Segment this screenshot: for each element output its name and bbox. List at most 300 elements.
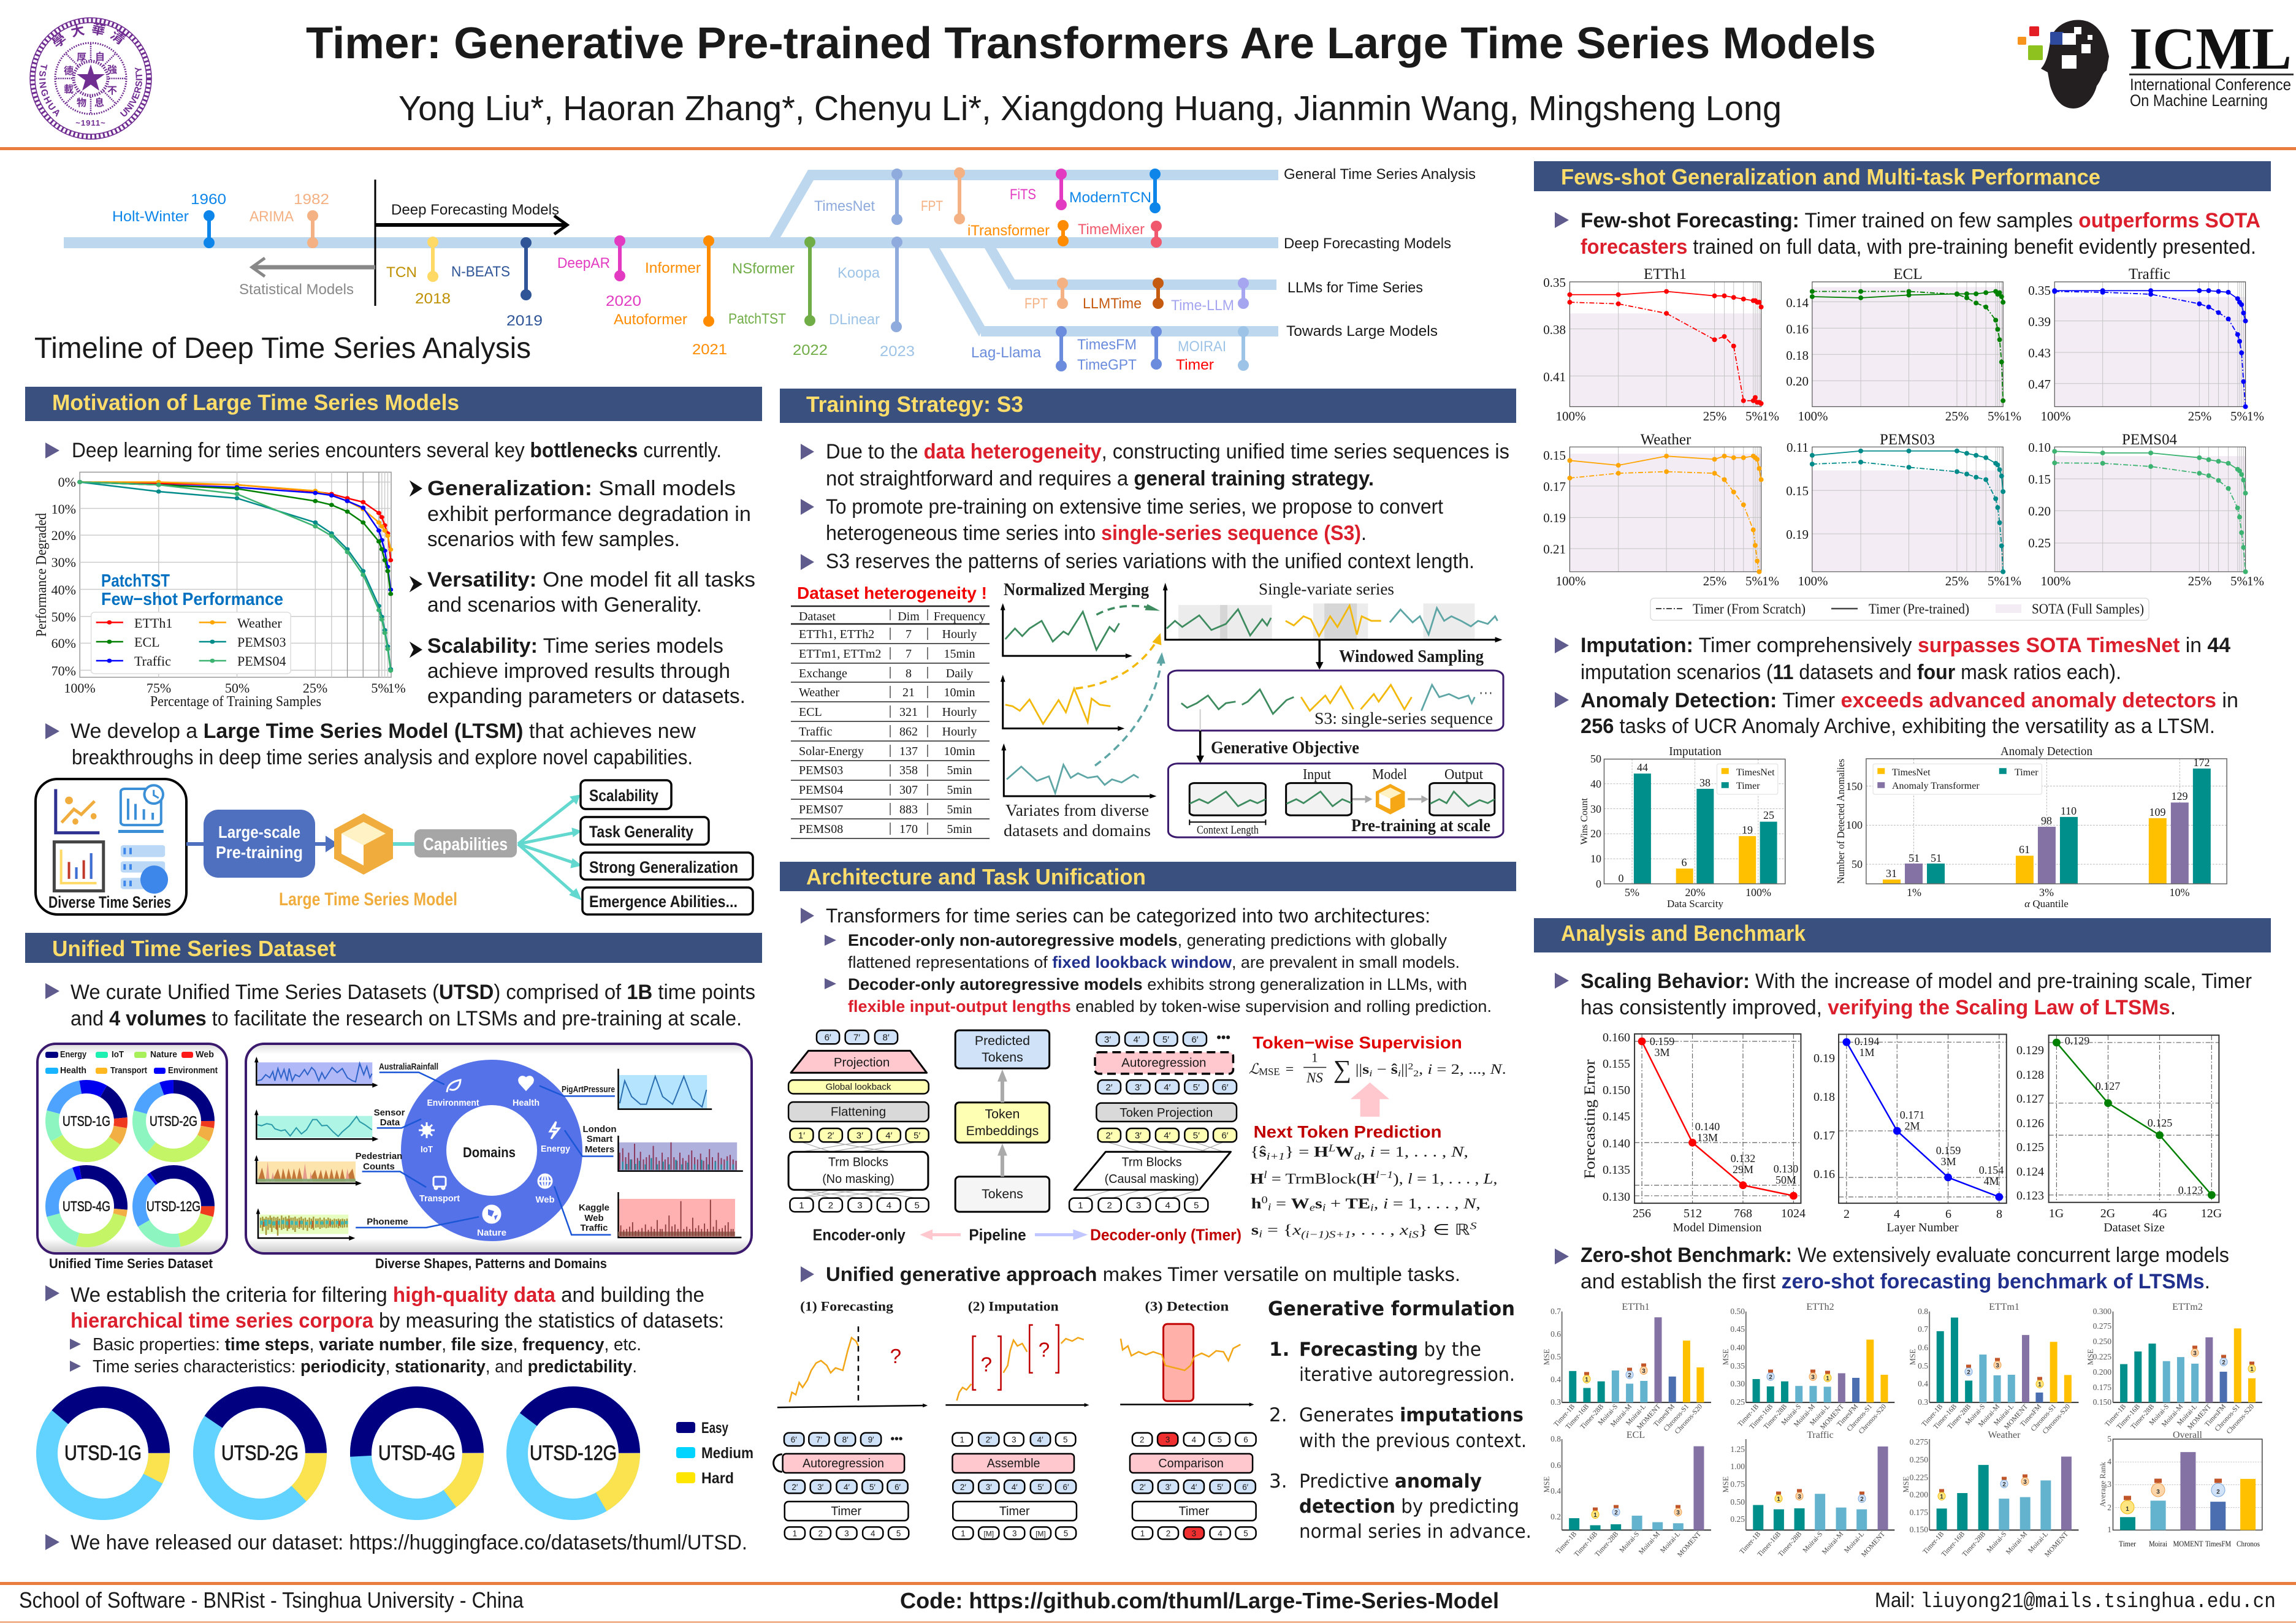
x labels: model names: Timer-16B bbox=[1565, 1403, 1590, 1431]
task: detection: (3) Detection bbox=[1145, 1299, 1229, 1314]
labels: S3 diagram: Pre-training at scale bbox=[1351, 816, 1490, 835]
formula: next token prediction: L bbox=[1327, 1142, 1335, 1154]
timeline labels: TimeMixer bbox=[1078, 221, 1145, 238]
task: forecasting: 6′ bbox=[894, 1483, 901, 1492]
panel: architecture and task unification bbox=[774, 862, 1531, 1543]
logo: Tsinghua University seal: 強 bbox=[107, 64, 117, 75]
table: dataset heterogeneity: Solar-Energy bbox=[799, 745, 864, 758]
legend: few-shot plots: Timer (Pre-trained) bbox=[1869, 601, 1969, 617]
decoder-only stack: Token Projection bbox=[1119, 1106, 1213, 1120]
chart: anomaly detection: α Quantile bbox=[2024, 898, 2069, 910]
decoder-only stack: 4′ bbox=[1164, 1082, 1171, 1093]
timeline labels bbox=[112, 166, 1476, 373]
plots: titles and ticks: 0.20 bbox=[2028, 504, 2051, 519]
chart: PatchTST few-shot performance: 60% bbox=[51, 636, 76, 651]
icon: diverse time series bbox=[36, 779, 186, 914]
x labels: model names: Moirai-L bbox=[1809, 1403, 1831, 1427]
titles and y ticks: 0.50 bbox=[1730, 1497, 1745, 1507]
x labels: model names: Timer-16B bbox=[2116, 1403, 2142, 1431]
labels: series names: Kaggle bbox=[579, 1203, 609, 1213]
timeline of deep time series analysis bbox=[34, 166, 1476, 373]
task: detection: 5 bbox=[1218, 1435, 1222, 1445]
task: imputation: 5 bbox=[1063, 1435, 1068, 1445]
logo: ICML: On Machine Learning bbox=[2130, 91, 2268, 110]
chart: imputation wins: 100% bbox=[1745, 886, 1771, 899]
task: imputation: (2) Imputation bbox=[968, 1299, 1059, 1314]
titles and y ticks: 0.4 bbox=[1550, 1486, 1561, 1496]
x labels: model names: MOMENT bbox=[2003, 1403, 2029, 1431]
timeline labels: 2018 bbox=[415, 291, 451, 307]
plots: titles and ticks: 100% bbox=[1798, 409, 1828, 424]
x labels: model names: Timer-1B bbox=[1920, 1403, 1944, 1428]
diagram: domains ring: IoT bbox=[421, 1144, 433, 1155]
chart: PatchTST few-shot performance: PEMS04 bbox=[237, 653, 286, 669]
formula: next token prediction: } = bbox=[1285, 1144, 1314, 1160]
medals: rankings: 3 bbox=[1811, 1374, 1815, 1381]
medals: rankings: 1 bbox=[2038, 1382, 2042, 1388]
x labels: model names: MOMENT bbox=[1636, 1403, 1662, 1431]
charts: scaling law: 4 bbox=[1894, 1207, 1900, 1221]
charts: scaling law: 50M bbox=[1775, 1174, 1796, 1186]
timeline bands bbox=[64, 170, 1278, 336]
labels: S3 diagram: Output bbox=[1444, 767, 1483, 783]
medals: rankings: 2 bbox=[2216, 1489, 2220, 1496]
x labels: model names: Timer-1B bbox=[1736, 1403, 1760, 1428]
plots: titles and ticks: Traffic bbox=[2129, 266, 2170, 283]
formula: token-wise supervision: ŝ bbox=[1391, 1061, 1398, 1077]
formula: token-wise supervision: i = 2, ..., N. bbox=[1427, 1061, 1505, 1077]
plots: titles and ticks: 0.43 bbox=[2028, 346, 2051, 360]
pipeline stack bbox=[955, 1030, 1050, 1212]
encoder-only stack: 5 bbox=[915, 1200, 920, 1211]
decoder-only stack: 3′ bbox=[1135, 1131, 1142, 1141]
task: detection: 2 bbox=[1166, 1529, 1170, 1538]
plots: titles and ticks: 1% bbox=[2247, 409, 2264, 424]
text: generative formulation: 3. bbox=[1269, 1470, 1287, 1492]
chart: UTSD-1G difficulty: UTSD-1G bbox=[64, 1442, 142, 1465]
plots: titles and ticks: 100% bbox=[1798, 574, 1828, 588]
logo: ICML: ICML bbox=[2129, 16, 2292, 82]
task: forecasting: ? bbox=[890, 1345, 901, 1368]
pipeline legend: Pipeline bbox=[969, 1226, 1026, 1244]
text: S3 bullets: S3 reserves the patterns of series variations with the unified context length. bbox=[826, 550, 1474, 573]
table: dataset heterogeneity: 10min bbox=[944, 686, 975, 699]
formula: token-wise supervision: 2 bbox=[1408, 1062, 1413, 1072]
boxes: capabilities list: Strong Generalization bbox=[589, 858, 738, 876]
labels: S3 diagram: Windowed Sampling bbox=[1339, 647, 1484, 666]
chart: imputation wins: 25 bbox=[1763, 809, 1774, 821]
task: detection: 6′ bbox=[1242, 1483, 1249, 1492]
callouts: generalization, versatility, scalability bbox=[410, 477, 755, 708]
x labels: model names: Moirai-M bbox=[2161, 1403, 2184, 1429]
chart: imputation wins: 40 bbox=[1590, 778, 1601, 790]
footer: code link: Code: https://github.com/thuml/Large-Time-Series-Model bbox=[900, 1588, 1499, 1613]
chart: UTSD-4G difficulty bbox=[358, 1394, 476, 1512]
chart: PatchTST few-shot performance: 1% bbox=[387, 680, 406, 696]
encoder-only stack: 1 bbox=[799, 1200, 804, 1211]
titles and y ticks: 0.7 bbox=[1550, 1307, 1561, 1316]
task: forecasting: 1 bbox=[793, 1529, 797, 1538]
labels: S3 diagram: Variates from diverse bbox=[1005, 801, 1149, 819]
charts: scaling law: 0.154 bbox=[1979, 1164, 2004, 1176]
task: forecasting bbox=[774, 1299, 928, 1539]
text: S3 bullets: heterogeneous time series into single-series sequence (S3). bbox=[826, 522, 1367, 545]
chart: imputation wins: Imputation bbox=[1669, 745, 1722, 758]
timeline labels: 1982 bbox=[294, 191, 329, 208]
titles and y ticks: MSE bbox=[1542, 1349, 1551, 1365]
formula: next token prediction: l bbox=[1264, 1169, 1267, 1180]
text: imputation and anomaly detection bbox=[1555, 634, 2238, 738]
table: dataset heterogeneity: 5min bbox=[947, 764, 972, 777]
legend: difficulty bbox=[676, 1420, 753, 1487]
decoder-only stack: 3 bbox=[1136, 1200, 1141, 1211]
titles and y ticks: MSE bbox=[1908, 1349, 1917, 1365]
titles and y ticks: ECL bbox=[1627, 1430, 1645, 1440]
table: dataset heterogeneity: Hourly bbox=[942, 628, 977, 641]
plots: titles and ticks: 1% bbox=[1762, 409, 1779, 424]
x labels: model names: Moirai-S bbox=[1986, 1530, 2008, 1554]
decoder-only stack: 2 bbox=[1107, 1200, 1112, 1211]
labels: series names: AustraliaRainfall bbox=[379, 1062, 438, 1072]
encoder-only stack: Projection bbox=[834, 1055, 890, 1070]
medals: rankings: 1 bbox=[1777, 1496, 1780, 1503]
text: architecture bullets: Transformers for time series can be categorized into two architectures: bbox=[826, 905, 1430, 927]
charts: scaling law: 0.129 bbox=[2065, 1035, 2089, 1047]
formula: next token prediction: H bbox=[1314, 1144, 1329, 1160]
legend: domains: Environment bbox=[168, 1065, 218, 1076]
panel: training strategy S3 bbox=[780, 389, 1516, 840]
encoder-only stack bbox=[788, 1030, 929, 1212]
formula: next token prediction: h bbox=[1251, 1195, 1262, 1212]
formula: next token prediction: l = 1, . . . , L, bbox=[1408, 1171, 1497, 1187]
encoder-only stack: 3 bbox=[857, 1200, 863, 1211]
charts: six few-shot line plots bbox=[1543, 266, 2264, 620]
logo: Tsinghua University seal: 載 bbox=[64, 83, 74, 95]
task: detection: Timer bbox=[1178, 1505, 1210, 1518]
charts: scaling law: Layer Number bbox=[1886, 1221, 1959, 1234]
charts: scaling law: 2M bbox=[1904, 1120, 1920, 1132]
charts: scaling law: 0.140 bbox=[1695, 1120, 1720, 1133]
task: imputation: 1 bbox=[961, 1529, 966, 1538]
table: dataset heterogeneity: 5min bbox=[947, 783, 972, 797]
timeline labels: FPT bbox=[921, 198, 943, 215]
charts: scaling law: 0.159 bbox=[1650, 1035, 1674, 1047]
timeline labels: TimesNet bbox=[814, 198, 875, 215]
labels: S3 diagram: Context Length bbox=[1197, 824, 1259, 837]
formula: next token prediction: , . . . , bbox=[1351, 1222, 1400, 1239]
decoder-only stack: 4′ bbox=[1164, 1131, 1171, 1141]
callouts: generalization, versatility, scalability: exhibit performance degradation in bbox=[427, 503, 751, 526]
charts: scaling law: 512 bbox=[1684, 1207, 1702, 1220]
chart: UTSD-12G difficulty: UTSD-12G bbox=[530, 1442, 617, 1465]
labels: S3 diagram: Normalized Merging bbox=[1004, 580, 1149, 599]
callouts: generalization, versatility, scalability: Scalability: Time series models bbox=[427, 634, 723, 658]
table: dataset heterogeneity: 883 bbox=[899, 803, 918, 816]
task: imputation: 6′ bbox=[1063, 1483, 1069, 1492]
x labels: model names: Moirai-M bbox=[1977, 1403, 2001, 1429]
charts: scaling law: 0.17 bbox=[1814, 1129, 1835, 1142]
plots: titles and ticks: 25% bbox=[1703, 574, 1726, 588]
chart: anomaly detection: 109 bbox=[2149, 806, 2165, 818]
decoder-only stack: 5′ bbox=[1193, 1131, 1200, 1141]
timeline labels: PatchTST bbox=[728, 311, 786, 327]
logo: Tsinghua University seal: ~1911~ bbox=[75, 118, 106, 127]
chart: imputation wins bbox=[1579, 745, 1785, 910]
encoder-only stack: 1′ bbox=[798, 1131, 805, 1141]
chart: anomaly detection: 1% bbox=[1907, 886, 1921, 899]
formula: next token prediction: i bbox=[1322, 1201, 1326, 1214]
formula: token-wise supervision: 1 bbox=[1311, 1051, 1318, 1065]
table: dataset heterogeneity: ETTh1, ETTh2 bbox=[799, 628, 874, 641]
text: generative formulation: with the previous context. bbox=[1299, 1430, 1527, 1452]
text: imputation and anomaly detection: 256 tasks of UCR Anomaly Archive, exhibiting the versatility as a LTSM. bbox=[1581, 715, 2215, 738]
chart: anomaly detection: 50 bbox=[1852, 858, 1863, 870]
formula: token-wise supervision: MSE bbox=[1259, 1066, 1280, 1078]
callouts: generalization, versatility, scalability: achieve improved results through bbox=[427, 659, 730, 683]
charts: scaling law: 0.135 bbox=[1603, 1163, 1630, 1177]
charts: scaling law: 3M bbox=[1940, 1155, 1956, 1168]
plots: titles and ticks: 5% bbox=[1988, 409, 2005, 424]
chart thumbnails: left four series examples bbox=[254, 1057, 378, 1241]
text: architecture bullets: flexible input-output lengths enabled by token-wise supervision and rolling prediction. bbox=[848, 997, 1492, 1016]
titles and y ticks: 0.8 bbox=[1550, 1434, 1561, 1443]
formula: next token prediction: (i−1)S+1 bbox=[1301, 1228, 1351, 1240]
x labels: model names: Timer-28B bbox=[1579, 1403, 1605, 1431]
box: large-scale pre-training bbox=[204, 810, 315, 878]
task: detection bbox=[1120, 1299, 1256, 1539]
chart: UTSD-1G domains: UTSD-1G bbox=[63, 1113, 110, 1129]
x labels: model names: Chronos-S20 bbox=[2225, 1403, 2256, 1435]
titles and y ticks: 1 bbox=[2107, 1525, 2111, 1534]
footer bbox=[0, 1582, 2296, 1623]
titles and y ticks: 0.3 bbox=[1550, 1397, 1561, 1407]
chart: imputation wins: Wins Count bbox=[1579, 797, 1590, 845]
formula: next token prediction: S bbox=[1470, 1220, 1477, 1232]
formula: token-wise supervision: − bbox=[1372, 1061, 1391, 1077]
table: dataset heterogeneity: 170 bbox=[899, 823, 918, 836]
titles and y ticks: 0.150 bbox=[2093, 1397, 2111, 1407]
timeline labels: Towards Large Models bbox=[1286, 323, 1438, 340]
plots: titles and ticks: 0.19 bbox=[1543, 511, 1566, 525]
logo: Tsinghua University seal: 息 bbox=[94, 97, 104, 108]
chart: UTSD-4G difficulty: UTSD-4G bbox=[378, 1442, 456, 1465]
text: imputation and anomaly detection: Anomaly Detection: Timer exceeds advanced anomaly detectors in bbox=[1581, 689, 2238, 712]
formula: token-wise supervision bbox=[1249, 1033, 1506, 1085]
task: forecasting: 5′ bbox=[869, 1483, 875, 1492]
charts: scaling law: 0.140 bbox=[1603, 1137, 1630, 1150]
charts: scaling law: 0.128 bbox=[2016, 1068, 2044, 1082]
chart: imputation wins: 20 bbox=[1590, 827, 1601, 840]
x labels: model names: Timer-16B bbox=[1573, 1530, 1599, 1559]
footer: mail: Mail: liuyong21@mails.tsinghua.edu.cn bbox=[1875, 1589, 2276, 1614]
encoder-only stack: 8′ bbox=[883, 1033, 890, 1043]
chart: difficulty donuts bbox=[24, 1374, 753, 1532]
captions: dataset figures bbox=[49, 1256, 607, 1271]
decoder-only stack: ••• bbox=[1216, 1030, 1230, 1044]
medals: rankings: 1 bbox=[1593, 1512, 1597, 1519]
titles and y ticks: 0.6 bbox=[1550, 1329, 1561, 1339]
pipeline stack: Tokens bbox=[982, 1050, 1023, 1065]
box: large-scale pre-training: Large-scale bbox=[218, 823, 300, 842]
text: generative formulation bbox=[1268, 1297, 1531, 1543]
timeline labels: 2020 bbox=[606, 293, 641, 310]
chart: PatchTST few-shot performance: 10% bbox=[51, 501, 76, 517]
diagram: domains ring: Domains bbox=[463, 1144, 516, 1160]
labels: S3 diagram: S3: single-series sequence bbox=[1314, 709, 1493, 728]
heading: architecture bbox=[780, 862, 1516, 891]
plots: titles and ticks: 0.18 bbox=[1786, 348, 1809, 363]
chart: UTSD-1G difficulty bbox=[24, 1374, 182, 1532]
task: detection: 2 bbox=[1140, 1435, 1144, 1445]
task: detection: 1 bbox=[1140, 1529, 1145, 1538]
chart: imputation wins: 38 bbox=[1699, 777, 1711, 789]
charts: scaling law: 1024 bbox=[1781, 1207, 1806, 1220]
plots: titles and ticks: 25% bbox=[2188, 574, 2211, 588]
charts: scaling law: 0.16 bbox=[1814, 1168, 1835, 1181]
table: dataset heterogeneity: PEMS07 bbox=[799, 803, 843, 816]
legend: domains: Health bbox=[60, 1065, 86, 1076]
labels: S3 diagram: Single-variate series bbox=[1259, 580, 1394, 598]
timeline labels: Lag-Llama bbox=[971, 344, 1042, 361]
chart: PatchTST few-shot performance: Few−shot Performance bbox=[101, 590, 283, 609]
titles and y ticks: 0.6 bbox=[1918, 1343, 1928, 1352]
formula: next token prediction: + bbox=[1325, 1195, 1346, 1212]
formula: next token prediction: i bbox=[1370, 1201, 1374, 1214]
task: detection: 6 bbox=[1243, 1435, 1248, 1445]
formula: token-wise supervision: ∑ bbox=[1333, 1055, 1351, 1083]
charts: scaling law: 0.125 bbox=[2148, 1117, 2172, 1129]
chart: UTSD-12G domains bbox=[125, 1158, 222, 1255]
chart: UTSD-2G domains: UTSD-2G bbox=[150, 1113, 197, 1129]
charts: scaling law: 0.160 bbox=[1603, 1031, 1630, 1044]
timeline labels: Koopa bbox=[837, 265, 880, 281]
task: imputation: 5 bbox=[1064, 1529, 1068, 1538]
heading: few-shot: Fews-shot Generalization and Multi-task Performance bbox=[1561, 164, 2100, 189]
text: S3 bullets bbox=[801, 440, 1509, 573]
labels: series names: Traffic bbox=[580, 1223, 608, 1233]
table: dataset heterogeneity: Frequency bbox=[934, 610, 985, 623]
labels: series names: PigArtPressure bbox=[562, 1084, 615, 1095]
chart: anomaly detection: 3% bbox=[2039, 886, 2054, 899]
text: S3 bullets: Due to the data heterogeneity, constructing unified time series sequences is bbox=[826, 440, 1509, 463]
chart: anomaly detection: 129 bbox=[2172, 790, 2187, 802]
decoder-only stack: 6′ bbox=[1191, 1035, 1199, 1045]
diagram: domains ring: Energy bbox=[541, 1144, 571, 1154]
plots: titles and ticks: 5% bbox=[2230, 409, 2248, 424]
plots: titles and ticks: 0.47 bbox=[2028, 377, 2051, 392]
chart: imputation wins: 44 bbox=[1637, 761, 1648, 773]
text: criteria bullet: Time series characteristics: periodicity, stationarity, and predictability. bbox=[93, 1357, 637, 1377]
callouts: generalization, versatility, scalability: Versatility: One model fit all tasks bbox=[427, 568, 755, 591]
text: architecture bullets: Decoder-only autoregressive models exhibits strong generalization in LLMs, with bbox=[848, 975, 1467, 994]
titles and y ticks: MSE bbox=[1542, 1477, 1551, 1492]
decoder-only stack: 3′ bbox=[1104, 1035, 1111, 1045]
decoder-only stack: 3′ bbox=[1135, 1082, 1142, 1093]
titles and y ticks: 0.35 bbox=[1730, 1361, 1745, 1370]
chart: PatchTST few-shot performance: 50% bbox=[51, 609, 76, 625]
table: dataset heterogeneity: 7 bbox=[906, 628, 912, 641]
task: imputation bbox=[945, 1299, 1089, 1539]
medals: rankings: 3 bbox=[1996, 1363, 1999, 1369]
task: forecasting: 2 bbox=[818, 1529, 823, 1538]
text: zero-shot benchmark bbox=[1555, 1244, 2229, 1293]
labels: series names: Pedestrian bbox=[356, 1151, 402, 1161]
charts: scaling law: 0.127 bbox=[2096, 1080, 2120, 1092]
formula: next token prediction: ), bbox=[1393, 1171, 1408, 1187]
titles and y ticks: 0.50 bbox=[1730, 1307, 1745, 1316]
titles and y ticks: 0.275 bbox=[1910, 1437, 1928, 1446]
callouts: generalization, versatility, scalability: and scenarios with Generality. bbox=[427, 593, 702, 617]
encoder-only stack: 2′ bbox=[827, 1131, 834, 1141]
labels: S3 diagram: datasets and domains bbox=[1004, 821, 1151, 840]
charts: scaling law: 0.130 bbox=[1774, 1163, 1798, 1175]
title: Timer: Generative Pre-trained Transformers Are Large Time Series Models bbox=[306, 19, 1876, 68]
plots: titles and ticks: 5% bbox=[1745, 409, 1763, 424]
panel: domain donuts bbox=[37, 1044, 227, 1255]
titles and y ticks: 0.225 bbox=[1910, 1473, 1928, 1482]
timeline labels: LLMTime bbox=[1083, 295, 1142, 312]
formula: next token prediction: i bbox=[1268, 1201, 1272, 1213]
formula: token-wise supervision: = bbox=[1286, 1062, 1294, 1078]
formula: token-wise supervision: 2 bbox=[1413, 1069, 1419, 1079]
chart: anomaly detection: 98 bbox=[2041, 815, 2052, 827]
titles and y ticks: 0.175 bbox=[2093, 1383, 2111, 1392]
charts: scaling law: 0.127 bbox=[2016, 1092, 2044, 1106]
diagram: domains ring: Transport bbox=[419, 1193, 460, 1204]
encoder-only stack: 3′ bbox=[856, 1131, 863, 1141]
labels: series names: Data bbox=[380, 1117, 400, 1128]
chart: UTSD-2G domains bbox=[125, 1073, 222, 1169]
titles and y ticks: 0.275 bbox=[2093, 1321, 2111, 1331]
diagram: domains ring bbox=[419, 1077, 571, 1238]
medals: rankings: 1 bbox=[2250, 1366, 2254, 1373]
formula: token-wise supervision: Token−wise Supervision bbox=[1253, 1033, 1462, 1052]
captions: dataset figures: Unified Time Series Dataset bbox=[49, 1256, 213, 1271]
plots: titles and ticks: 5% bbox=[1745, 574, 1763, 588]
formula: next token prediction: i = 1, . . . , N, bbox=[1383, 1195, 1479, 1212]
labels: S3 diagram bbox=[1004, 580, 1493, 840]
formula: next token prediction: H bbox=[1250, 1171, 1264, 1187]
text: generative formulation: iterative autoregression. bbox=[1299, 1364, 1515, 1386]
pipeline legend bbox=[813, 1226, 1241, 1244]
plots: titles and ticks: ETTh1 bbox=[1644, 266, 1687, 283]
decoder-only stack: 6′ bbox=[1221, 1131, 1229, 1141]
legend: difficulty: Easy bbox=[701, 1420, 728, 1437]
logo: Tsinghua University seal: 學大華清 bbox=[51, 22, 126, 47]
x labels: model names: Chronos-S1 bbox=[2030, 1403, 2058, 1433]
x labels: model names: Moirai-L bbox=[1625, 1403, 1647, 1427]
chart: UTSD-12G difficulty bbox=[495, 1375, 652, 1532]
legend: domains: Energy bbox=[60, 1049, 87, 1060]
chart: imputation wins: 0 bbox=[1596, 878, 1601, 890]
labels: S3 diagram: Model bbox=[1372, 767, 1407, 783]
chart: imputation wins: 10 bbox=[1590, 853, 1601, 865]
x labels: overall: Moirai bbox=[2149, 1539, 2167, 1548]
table: dataset heterogeneity: PEMS08 bbox=[799, 823, 843, 836]
encoder-only stack: Trm Blocks bbox=[828, 1155, 888, 1169]
text: criteria bullet: Basic properties: time steps, variate number, file size, frequency, etc. bbox=[93, 1335, 641, 1355]
decoder-only stack: 5 bbox=[1194, 1200, 1199, 1211]
titles and y ticks: Overall bbox=[2173, 1430, 2203, 1440]
x labels: model names: Moirai-L bbox=[2027, 1530, 2050, 1554]
timeline labels: Autoformer bbox=[614, 311, 687, 328]
task: imputation: 3 bbox=[1012, 1435, 1016, 1445]
formula: next token prediction: s bbox=[1251, 1222, 1259, 1239]
formula: next token prediction: } ∈ ℝ bbox=[1419, 1222, 1470, 1239]
table: dataset heterogeneity: 15min bbox=[944, 647, 975, 661]
x labels: model names: Timer-1B bbox=[1921, 1530, 1945, 1556]
charts: zero-shot benchmark bars bbox=[1542, 1302, 2262, 1559]
